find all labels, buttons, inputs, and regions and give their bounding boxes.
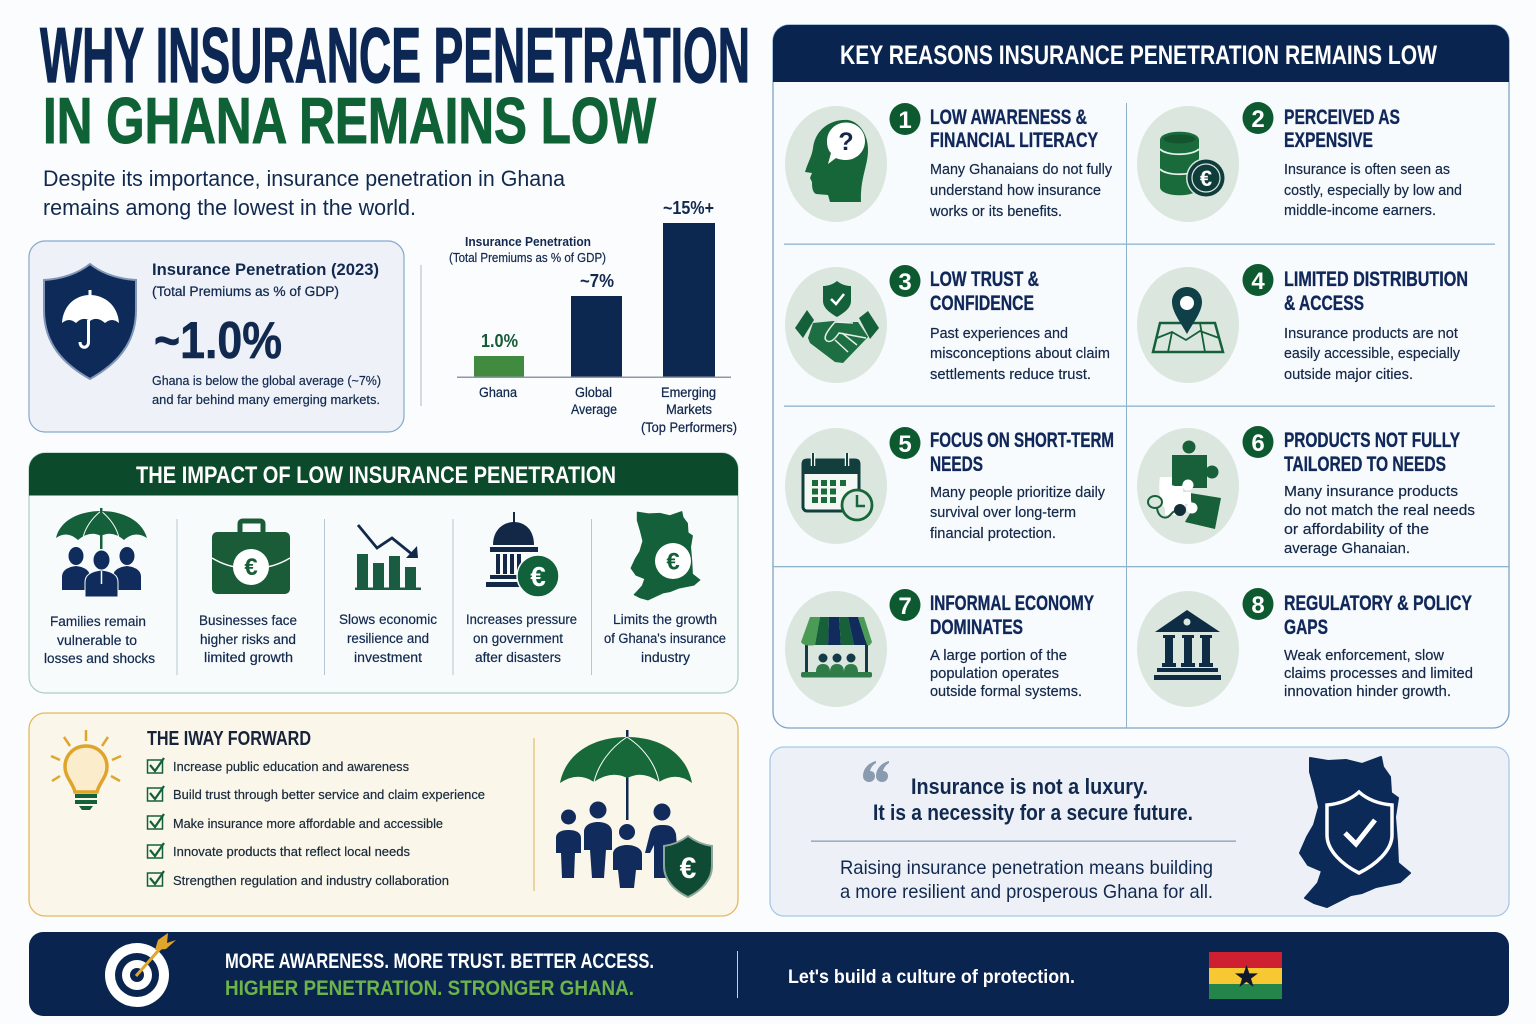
reason 6: products not tailored: do not match the real needs bbox=[1284, 503, 1475, 519]
icon: family under umbrella with shield bbox=[556, 730, 712, 897]
badge: 5 bbox=[890, 427, 920, 459]
reason 4: limited distribution bbox=[1137, 264, 1468, 383]
text: businesses: higher risks and bbox=[200, 632, 296, 647]
footer call to action: Let's build a culture of protection. bbox=[788, 967, 1075, 988]
reason 6: products not tailored: or affordability of the bbox=[1284, 522, 1429, 538]
reason 6: products not tailored: average Ghanaian. bbox=[1284, 541, 1410, 557]
text: businesses: Businesses face bbox=[199, 613, 297, 628]
reason 6: products not tailored: Many insurance products bbox=[1284, 484, 1458, 500]
bar chart: insurance penetration comparison: Global bbox=[575, 385, 612, 400]
icon: briefcase with euro bbox=[212, 521, 290, 594]
subtitle bbox=[43, 166, 565, 220]
reason 3: low trust: CONFIDENCE bbox=[930, 291, 1034, 315]
footer band bbox=[29, 932, 1509, 1016]
footer slogan: HIGHER PENETRATION. STRONGER GHANA. bbox=[225, 977, 634, 1000]
text: government bbox=[466, 612, 577, 665]
badge: 1 bbox=[890, 103, 920, 135]
checklist: Innovate products that reflect local needs bbox=[173, 844, 410, 859]
checklist: Make insurance more affordable and accessible bbox=[173, 816, 443, 831]
reason 3: low trust: settlements reduce trust. bbox=[930, 367, 1091, 383]
badge: 2: 2 bbox=[1251, 106, 1265, 133]
bar chart: insurance penetration comparison: ~7% bbox=[580, 271, 614, 291]
panel: quote bbox=[770, 747, 1509, 916]
icon: government building with euro: € bbox=[530, 561, 546, 592]
reason 3: low trust: Past experiences and bbox=[930, 326, 1068, 342]
reason 2: perceived as expensive: EXPENSIVE bbox=[1284, 128, 1373, 152]
icon: quote marks bbox=[863, 761, 889, 782]
text: economic bbox=[339, 612, 437, 665]
text: industry: industry bbox=[641, 650, 690, 665]
supporting text bbox=[840, 857, 1213, 903]
badge: 3 bbox=[890, 265, 920, 297]
icon: family under umbrella with shield: € bbox=[680, 852, 697, 885]
text: industry bbox=[604, 612, 726, 665]
reason 5: short-term needs: FOCUS ON SHORT-TERM bbox=[930, 428, 1114, 452]
reason 6: products not tailored: PRODUCTS NOT FULLY bbox=[1284, 428, 1460, 452]
reason 1: low awareness: LOW AWARENESS & bbox=[930, 105, 1087, 129]
reason 1: low awareness: Many Ghanaians do not fully bbox=[930, 162, 1113, 178]
panel: penetration stat card bbox=[29, 241, 404, 432]
reason 1: low awareness: understand how insurance bbox=[930, 183, 1101, 199]
text: industry: Limits the growth bbox=[613, 612, 717, 627]
text: economic: Slows economic bbox=[339, 612, 437, 627]
panel: impact of low insurance penetration bbox=[29, 453, 738, 693]
reason 1: low awareness: FINANCIAL LITERACY bbox=[930, 128, 1098, 152]
reason 5: short-term needs: NEEDS bbox=[930, 452, 983, 476]
reason 2: perceived as expensive: middle-income earners. bbox=[1284, 203, 1436, 219]
badge: 4: 4 bbox=[1251, 268, 1265, 295]
quote text bbox=[873, 774, 1193, 825]
heading: way forward: THE IWAY FORWARD bbox=[147, 728, 311, 750]
panel: penetration stat card: Ghana is below the global average (~7%) bbox=[152, 373, 381, 388]
text: families: Families remain bbox=[50, 614, 146, 629]
badge: 2 bbox=[1242, 102, 1274, 134]
text: families: vulnerable to bbox=[57, 633, 137, 648]
checklist: Strengthen regulation and industry collaboration bbox=[173, 873, 449, 888]
supporting text: Raising insurance penetration means building bbox=[840, 857, 1213, 879]
icon: head with question mark bbox=[805, 120, 868, 202]
icon: coins with euro: € bbox=[1200, 166, 1212, 191]
reason 6: products not tailored: TAILORED TO NEEDS bbox=[1284, 452, 1446, 476]
panel: penetration stat card: (Total Premiums as % of GDP) bbox=[152, 284, 339, 299]
checklist: Increase public education and awareness bbox=[173, 759, 409, 774]
reason 7: informal economy bbox=[785, 589, 1094, 707]
badge: 8 bbox=[1242, 588, 1274, 620]
supporting text: a more resilient and prosperous Ghana for all. bbox=[840, 881, 1213, 903]
badge: 6 bbox=[1242, 426, 1274, 458]
icon: head with question mark: ? bbox=[838, 128, 854, 156]
badge: 1: 1 bbox=[898, 107, 912, 134]
reason 4: limited distribution: easily accessible, especially bbox=[1284, 346, 1461, 362]
text: industry: of Ghana's insurance bbox=[604, 631, 726, 646]
bar chart: insurance penetration comparison: Emerging bbox=[661, 385, 716, 400]
badge: 4 bbox=[1242, 264, 1274, 296]
reason 4: limited distribution: & ACCESS bbox=[1284, 291, 1364, 315]
icon: map with location pin bbox=[1153, 287, 1223, 352]
reason 5: short-term needs bbox=[785, 427, 1114, 544]
bar chart: insurance penetration comparison: Markets bbox=[666, 402, 712, 417]
icon: bank building bbox=[1154, 610, 1221, 680]
icon: government building with euro bbox=[486, 512, 559, 597]
reason 2: perceived as expensive: Insurance is often seen as bbox=[1284, 162, 1450, 178]
text: businesses: limited growth bbox=[204, 650, 293, 665]
reason 5: short-term needs: financial protection. bbox=[930, 526, 1056, 542]
reason 6: products not tailored bbox=[1137, 426, 1475, 557]
reason 7: informal economy: INFORMAL ECONOMY bbox=[930, 591, 1094, 615]
reason 4: limited distribution: Insurance products are not bbox=[1284, 326, 1458, 342]
title: WHY INSURANCE PENETRATION bbox=[40, 11, 750, 99]
footer slogan: MORE AWARENESS. MORE TRUST. BETTER ACCESS. bbox=[225, 950, 654, 973]
reason 1: low awareness bbox=[785, 103, 1113, 222]
bar chart: insurance penetration comparison: Average bbox=[571, 402, 617, 417]
icon: family under umbrella bbox=[56, 508, 147, 597]
bar chart: insurance penetration comparison bbox=[420, 198, 737, 435]
icon: market stall bbox=[801, 617, 872, 678]
reason 4: limited distribution: outside major cities. bbox=[1284, 367, 1413, 383]
bar chart: insurance penetration comparison: (Top Performers) bbox=[641, 420, 737, 435]
icon: target with arrow bbox=[105, 933, 176, 1007]
reason 8: regulatory gaps: Weak enforcement, slow bbox=[1284, 648, 1445, 664]
reason 8: regulatory gaps: GAPS bbox=[1284, 615, 1328, 639]
reason 7: informal economy: outside formal systems. bbox=[930, 684, 1082, 700]
icon: light bulb bbox=[51, 730, 121, 810]
bar chart: insurance penetration comparison: Insurance Penetration bbox=[465, 235, 591, 249]
reason 2: perceived as expensive: costly, especially by low and bbox=[1284, 183, 1462, 199]
reason 8: regulatory gaps: REGULATORY & POLICY bbox=[1284, 591, 1472, 615]
panel: the way forward bbox=[29, 713, 738, 916]
bar chart: insurance penetration comparison: (Total Premiums as % of GDP) bbox=[449, 251, 606, 265]
badge: 7 bbox=[890, 589, 920, 621]
badge: 8: 8 bbox=[1251, 592, 1265, 619]
title bbox=[40, 11, 750, 157]
text: families bbox=[44, 614, 155, 666]
reason 3: low trust: LOW TRUST & bbox=[930, 267, 1039, 291]
heading: impact: THE IMPACT OF LOW INSURANCE PENETRATION bbox=[136, 462, 616, 489]
bar chart: insurance penetration comparison: Ghana bbox=[479, 385, 517, 400]
text: families: losses and shocks bbox=[44, 651, 155, 666]
quote text: It is a necessity for a secure future. bbox=[873, 800, 1193, 825]
icon: briefcase with euro: € bbox=[244, 554, 258, 581]
icon: coins with euro bbox=[1160, 132, 1226, 198]
reason 1: low awareness: works or its benefits. bbox=[929, 204, 1062, 220]
icon: calendar with clock bbox=[802, 453, 872, 520]
badge: 3: 3 bbox=[898, 269, 912, 296]
panel: penetration stat card: ~1.0% bbox=[154, 312, 282, 370]
badge: 5: 5 bbox=[898, 431, 912, 458]
panel: penetration stat card: Insurance Penetration (2023) bbox=[152, 260, 379, 279]
checklist bbox=[148, 758, 485, 888]
panel: penetration stat card: and far behind many emerging markets. bbox=[152, 392, 380, 407]
badge: 7: 7 bbox=[898, 593, 912, 620]
reason 7: informal economy: A large portion of the bbox=[930, 648, 1067, 664]
reason 5: short-term needs: Many people prioritize daily bbox=[930, 485, 1106, 501]
icon: Ghana map with euro: € bbox=[666, 548, 680, 576]
bar chart: insurance penetration comparison: 1.0% bbox=[481, 331, 518, 351]
text: economic: investment bbox=[354, 650, 422, 665]
reason 7: informal economy: DOMINATES bbox=[930, 615, 1023, 639]
icon: falling chart bbox=[355, 525, 421, 590]
icon: shield with umbrella bbox=[44, 264, 136, 379]
reason 4: limited distribution: LIMITED DISTRIBUTION bbox=[1284, 267, 1468, 291]
reason 3: low trust: misconceptions about claim bbox=[930, 346, 1110, 362]
text: government: after disasters bbox=[475, 650, 561, 665]
checklist: Build trust through better service and claim experience bbox=[173, 787, 485, 802]
bar chart: insurance penetration comparison: ~15%+ bbox=[663, 198, 714, 218]
panel: key reasons bbox=[773, 25, 1509, 728]
footer slogan bbox=[225, 950, 654, 1000]
reason 5: short-term needs: survival over long-term bbox=[930, 505, 1076, 521]
reason 8: regulatory gaps: innovation hinder growth. bbox=[1284, 684, 1451, 700]
reason 8: regulatory gaps: claims processes and limited bbox=[1284, 666, 1473, 682]
subtitle: remains among the lowest in the world. bbox=[43, 195, 416, 220]
icon: handshake with shield bbox=[795, 281, 879, 363]
badge: 6: 6 bbox=[1251, 430, 1265, 457]
reason 2: perceived as expensive: PERCEIVED AS bbox=[1284, 105, 1400, 129]
reason 7: informal economy: population operates bbox=[930, 666, 1059, 682]
icon: Ghana map with shield bbox=[1300, 757, 1410, 907]
text: economic: resilience and bbox=[347, 631, 429, 646]
reason 2: perceived as expensive bbox=[1137, 102, 1462, 222]
title: IN GHANA REMAINS LOW bbox=[43, 84, 656, 157]
icon: Ghana map with euro bbox=[631, 512, 700, 600]
icon: puzzle pieces with stethoscope bbox=[1148, 440, 1221, 529]
text: businesses bbox=[199, 613, 297, 665]
text: government: Increases pressure bbox=[466, 612, 577, 627]
reason 3: low trust bbox=[785, 265, 1110, 383]
icon: Ghana flag bbox=[1209, 952, 1282, 999]
reason 8: regulatory gaps bbox=[1137, 588, 1473, 707]
text: government: on government bbox=[473, 631, 563, 646]
subtitle: Despite its importance, insurance penetration in Ghana bbox=[43, 166, 565, 191]
quote text: Insurance is not a luxury. bbox=[911, 774, 1148, 799]
